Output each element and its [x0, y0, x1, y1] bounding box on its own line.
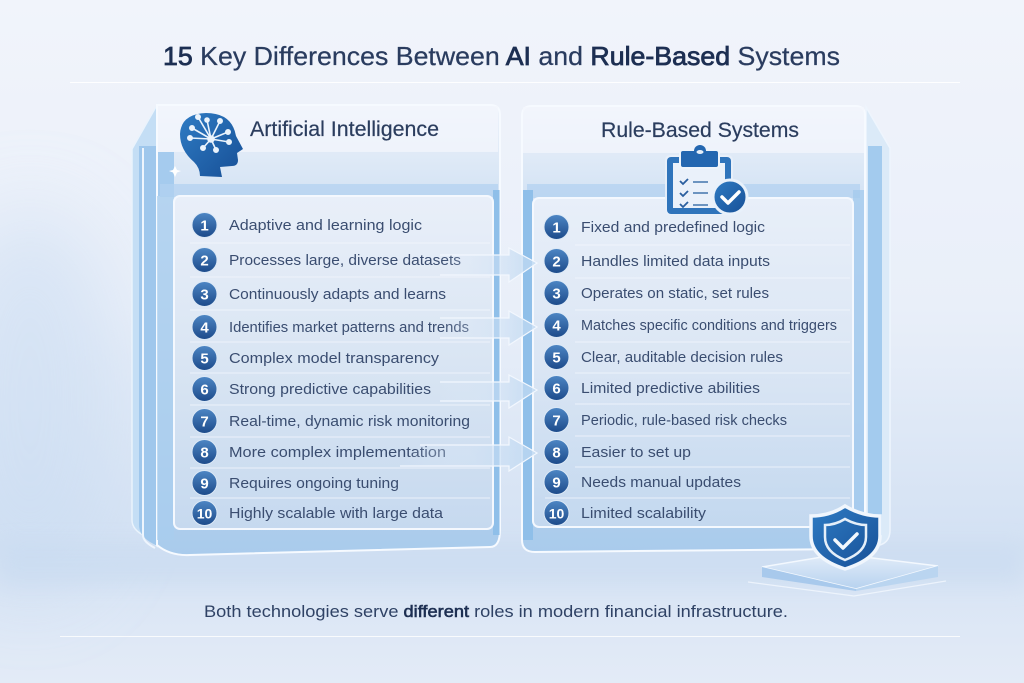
heading: artificial intelligence: Artificial Intelligence: [250, 118, 439, 141]
item 8: [544, 440, 691, 464]
list items: AI: [192, 212, 470, 526]
item 10: 10: [197, 506, 212, 522]
item 6: Limited predictive abilities: [581, 380, 760, 397]
item 4: [192, 314, 469, 340]
item 6: 6: [200, 382, 209, 398]
item 6: 6: [552, 380, 561, 398]
item 7: Real-time, dynamic risk monitoring: [229, 413, 470, 430]
item 6: [192, 376, 431, 402]
arrow: row 8: [400, 437, 537, 471]
item 5: [544, 344, 783, 370]
item 5: 5: [200, 350, 209, 368]
item 10: [192, 500, 444, 526]
item 3: Operates on static, set rules: [581, 285, 769, 302]
icon: shield on platform: [748, 506, 946, 596]
item 10: 10: [549, 506, 564, 522]
item 5: 5: [552, 350, 561, 366]
item 2: 2: [552, 254, 561, 270]
item 6: [544, 376, 760, 400]
item 9: 9: [200, 476, 209, 492]
item 10: Highly scalable with large data: [229, 505, 444, 522]
title: 15 Key Differences Between AI and Rule-Based Systems: [163, 41, 840, 71]
icon: sparkle: [169, 166, 181, 177]
item 1: Adaptive and learning logic: [229, 217, 423, 234]
item 9: [544, 470, 741, 494]
item 3: Continuously adapts and learns: [229, 286, 446, 303]
item 9: 9: [552, 474, 561, 492]
heading: rule-based systems: Rule-Based Systems: [601, 119, 799, 142]
arrow: row 2: [440, 248, 537, 282]
list items: rules: [544, 214, 837, 526]
item 2: [544, 248, 770, 274]
icon: AI head: [180, 113, 243, 177]
item 9: [192, 470, 399, 496]
item 7: [192, 408, 470, 434]
list card: rules: [533, 198, 853, 527]
item 10: [544, 500, 707, 526]
item 8: Easier to set up: [581, 444, 691, 461]
item 9: Requires ongoing tuning: [229, 475, 399, 492]
item 2: 2: [200, 252, 209, 270]
item 3: [544, 280, 769, 306]
item 6: Strong predictive capabilities: [229, 381, 431, 398]
item 8: More complex implementation: [229, 444, 446, 461]
item 4: 4: [200, 320, 209, 336]
item 7: 7: [552, 412, 561, 430]
icon: clipboard checklist: [665, 145, 747, 215]
item 1: Fixed and predefined logic: [581, 219, 766, 236]
item 1: 1: [552, 220, 561, 236]
arrows between panels: [400, 248, 537, 471]
row dividers: [545, 245, 850, 498]
item 1: 1: [200, 218, 209, 234]
item 5: Complex model transparency: [229, 350, 440, 367]
item 9: Needs manual updates: [581, 474, 741, 491]
item 5: Clear, auditable decision rules: [581, 349, 783, 366]
item 10: Limited scalability: [581, 505, 707, 522]
item 1: [544, 214, 766, 240]
item 7: 7: [200, 414, 209, 430]
list card: AI: [174, 196, 493, 529]
item 8: [192, 440, 446, 464]
platform: [748, 554, 946, 596]
item 7: [544, 408, 787, 432]
panel: rule-based systems: [522, 106, 890, 552]
item 4: Matches specific conditions and triggers: [581, 317, 837, 334]
item 8: 8: [200, 444, 209, 462]
item 4: Identifies market patterns and trends: [229, 319, 469, 336]
shield: [811, 506, 880, 569]
item 2: [192, 248, 461, 272]
item 8: 8: [552, 444, 561, 462]
arrow: row 6: [440, 375, 537, 408]
panel: artificial intelligence: [132, 105, 500, 555]
item 3: 3: [200, 286, 209, 304]
arrow: row 4: [440, 311, 537, 345]
back glass layers: [132, 105, 500, 555]
item 2: Handles limited data inputs: [581, 253, 770, 270]
row dividers: [190, 243, 490, 498]
item 4: 4: [552, 318, 561, 334]
back glass layers: [522, 106, 890, 552]
item 3: 3: [552, 286, 561, 302]
item 4: [544, 312, 837, 338]
footer caption: Both technologies serve different roles in modern financial infrastructure.: [204, 602, 788, 621]
item 5: [192, 346, 440, 370]
item 2: Processes large, diverse datasets: [229, 252, 461, 269]
item 1: [192, 212, 423, 238]
item 3: [192, 282, 446, 306]
item 7: Periodic, rule-based risk checks: [581, 412, 787, 429]
